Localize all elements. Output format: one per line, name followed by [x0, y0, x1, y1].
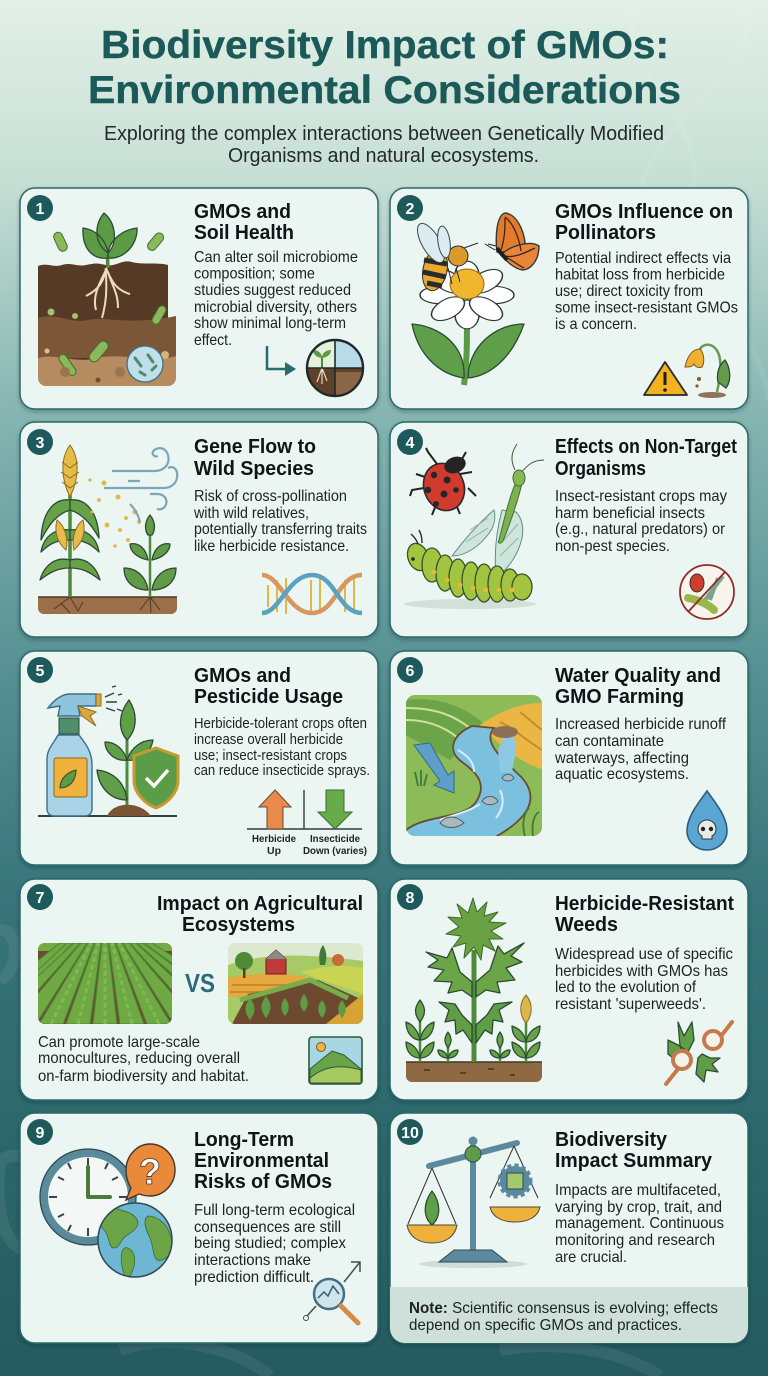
note band background	[390, 1287, 748, 1343]
heading and body: Herbicide-Resistant	[555, 892, 734, 915]
title: Environmental Considerations	[88, 69, 681, 112]
body text and heading: microbial diversity, others	[194, 299, 357, 316]
illustration: diverse farm	[228, 943, 363, 1024]
heading: Ecosystems	[182, 913, 295, 936]
heading and body: Long-Term	[194, 1128, 294, 1151]
heading and body: Organisms	[555, 457, 646, 480]
body text	[38, 1034, 249, 1085]
heading and body: GMOs and	[194, 664, 291, 687]
badge 10: 10	[401, 1125, 419, 1142]
heading and body: Water Quality and	[555, 664, 721, 687]
heading and body	[555, 200, 738, 333]
badge 7	[27, 884, 53, 910]
badge 6	[397, 657, 423, 683]
heading and body: Risk of cross-pollination	[194, 488, 347, 505]
illustration: spray bottle, plant and shield	[38, 686, 178, 816]
heading and body	[194, 1128, 355, 1286]
heading and body: GMO Farming	[555, 685, 684, 708]
badge 10	[397, 1119, 423, 1145]
heading and body	[555, 892, 734, 1013]
badge 6: 6	[406, 663, 415, 680]
illustration: soil cross-section with plant	[38, 213, 176, 386]
heading and body: Widespread use of specific	[555, 946, 733, 963]
badge 7: 7	[36, 890, 45, 907]
icon: no insects	[680, 565, 734, 619]
chart: herbicide up, insecticide down: Insecticide	[310, 833, 360, 845]
heading and body: Impacts are multifaceted,	[555, 1182, 721, 1199]
heading and body: Increased herbicide runoff	[555, 716, 727, 733]
heading and body: habitat loss from herbicide	[555, 266, 725, 284]
heading and body	[555, 1128, 724, 1266]
badge 3: 3	[36, 435, 45, 452]
heading and body	[193, 435, 367, 555]
title: Biodiversity Impact of GMOs:	[101, 24, 669, 67]
chart: herbicide up, insecticide down: Herbicide	[252, 833, 296, 845]
heading and body: Herbicide-tolerant crops often	[194, 715, 367, 732]
heading and body: Risks of GMOs	[194, 1170, 332, 1193]
heading and body: Gene Flow to	[194, 435, 316, 458]
illustration: ladybug, lacewing, caterpillar	[404, 444, 544, 609]
panel 10: summary	[390, 1113, 748, 1343]
icon: soil change circle	[305, 340, 365, 398]
heading and body	[554, 664, 727, 783]
panel 4: non-target organisms	[390, 422, 748, 637]
illustration: corn plant, wild relative and pollen	[38, 445, 177, 614]
icon: landscape	[309, 1037, 362, 1084]
heading and body: herbicides with GMOs has	[555, 963, 728, 980]
heading and body: interactions make	[194, 1252, 311, 1269]
heading and body: harm beneficial insects	[555, 505, 705, 522]
heading and body: use; insect-resistant crops	[194, 747, 347, 764]
panel 2: pollinators	[390, 188, 748, 409]
body text and heading	[194, 200, 358, 349]
icon: magnifier with trend arrow	[304, 1262, 360, 1323]
badge 5: 5	[36, 663, 45, 680]
body text and heading: Soil Health	[194, 221, 294, 244]
heading and body	[555, 435, 737, 555]
badge 1: 1	[36, 201, 45, 218]
note: depend on specific GMOs and practices.	[409, 1317, 682, 1334]
illustration: bee, butterfly and daisy	[412, 213, 539, 385]
body text and heading: show minimal long-term	[194, 315, 346, 332]
heading and body: like herbicide resistance.	[194, 538, 349, 555]
body text: Can promote large-scale	[38, 1034, 200, 1051]
icon: DNA helix	[262, 575, 362, 614]
subtitle: Exploring the complex interactions between Genetically Modified	[104, 122, 664, 145]
heading and body: some insect-resistant GMOs	[555, 300, 738, 316]
subtitle	[104, 122, 664, 167]
panel 1: soil health	[20, 188, 378, 409]
illustration: clock, question bubble, globe	[40, 1144, 175, 1278]
title	[88, 24, 681, 112]
illustration: monoculture field	[38, 943, 172, 1024]
badge 2	[397, 195, 423, 221]
heading	[157, 892, 363, 936]
chart: herbicide up, insecticide down: Down (varies)	[303, 845, 367, 857]
panel 3: gene flow	[20, 422, 378, 637]
note	[409, 1300, 718, 1334]
chart: herbicide up, insecticide down: Up	[267, 845, 281, 857]
heading: Impact on Agricultural	[157, 892, 363, 915]
heading and body: Effects on Non-Target	[555, 435, 737, 458]
subtitle: Organisms and natural ecosystems.	[228, 144, 539, 167]
heading and body: with wild relatives,	[193, 505, 309, 522]
arrow	[267, 346, 296, 376]
heading and body: is a concern.	[555, 316, 637, 333]
body text and heading: GMOs and	[194, 200, 291, 223]
heading and body: aquatic ecosystems.	[555, 766, 689, 783]
illustration: river through farmland	[404, 695, 542, 842]
badge 2: 2	[406, 201, 415, 218]
panel 5: pesticide usage	[20, 651, 378, 865]
heading and body: Biodiversity	[555, 1128, 668, 1151]
badge 5	[27, 657, 53, 683]
badge 9	[27, 1119, 53, 1145]
heading and body: waterways, affecting	[554, 750, 689, 767]
badge 4	[397, 429, 423, 455]
badge 8	[397, 884, 423, 910]
heading and body: Full long-term ecological	[194, 1202, 355, 1219]
panel 7: agricultural ecosystems	[0, 879, 378, 1100]
illustration: clock, question bubble, globe: ?	[139, 1151, 161, 1192]
heading and body: being studied; complex	[194, 1235, 346, 1252]
heading and body: use; direct toxicity from	[555, 283, 703, 300]
heading and body: monitoring and research	[555, 1232, 715, 1249]
heading and body	[194, 664, 370, 779]
body text and heading: Can alter soil microbiome	[194, 249, 358, 266]
heading and body: Potential indirect effects via	[555, 250, 731, 267]
heading and body: Impact Summary	[555, 1149, 713, 1172]
badge 9: 9	[36, 1125, 45, 1142]
chart: herbicide up, insecticide down	[247, 790, 367, 857]
heading and body: potentially transferring traits	[194, 521, 367, 538]
icon: toxic water drop	[687, 791, 727, 850]
heading and body: are crucial.	[555, 1249, 627, 1266]
icon: broken chain with weeds	[666, 1022, 732, 1084]
heading and body: varying by crop, trait, and	[555, 1199, 722, 1216]
heading and body: prediction difficult.	[194, 1269, 314, 1286]
badge 8: 8	[406, 890, 415, 907]
icon: warning and wilted flower	[644, 345, 730, 398]
heading and body: non-pest species.	[555, 538, 670, 555]
panel 6: water quality	[390, 651, 748, 865]
heading and body: (e.g., natural predators) or	[555, 521, 725, 538]
body text: on-farm biodiversity and habitat.	[38, 1068, 249, 1085]
badge 3	[27, 429, 53, 455]
heading and body: Weeds	[555, 913, 618, 936]
heading and body: increase overall herbicide	[194, 731, 343, 748]
panel 9: long-term risks	[20, 1113, 378, 1343]
heading and body: can contaminate	[555, 733, 664, 750]
body text and heading: effect.	[194, 332, 232, 349]
illustration: superweed and crops	[406, 898, 542, 1082]
VS label: VS	[185, 968, 215, 998]
heading and body: Environmental	[194, 1149, 329, 1172]
body text and heading: studies suggest reduced	[194, 282, 351, 299]
panel 8: resistant weeds	[390, 879, 748, 1100]
note: Note: Scientific consensus is evolving; effects	[409, 1300, 718, 1317]
heading and body: led to the evolution of	[555, 979, 697, 996]
heading and body: Insect-resistant crops may	[555, 488, 727, 505]
heading and body: Wild Species	[194, 457, 314, 480]
heading and body: Pesticide Usage	[194, 685, 343, 708]
heading and body: GMOs Influence on	[555, 200, 733, 223]
badge 4: 4	[406, 435, 415, 452]
heading and body: management. Continuous	[555, 1215, 724, 1232]
badge 1	[27, 195, 53, 221]
body text and heading: composition; some	[194, 266, 315, 282]
heading and body: can reduce insecticide sprays.	[194, 762, 370, 779]
heading and body: resistant 'superweeds'.	[555, 996, 706, 1013]
illustration: balance scale	[407, 1136, 540, 1268]
heading and body: consequences are still	[194, 1219, 341, 1236]
heading and body: Pollinators	[555, 221, 656, 244]
body text: monocultures, reducing overall	[38, 1050, 240, 1067]
